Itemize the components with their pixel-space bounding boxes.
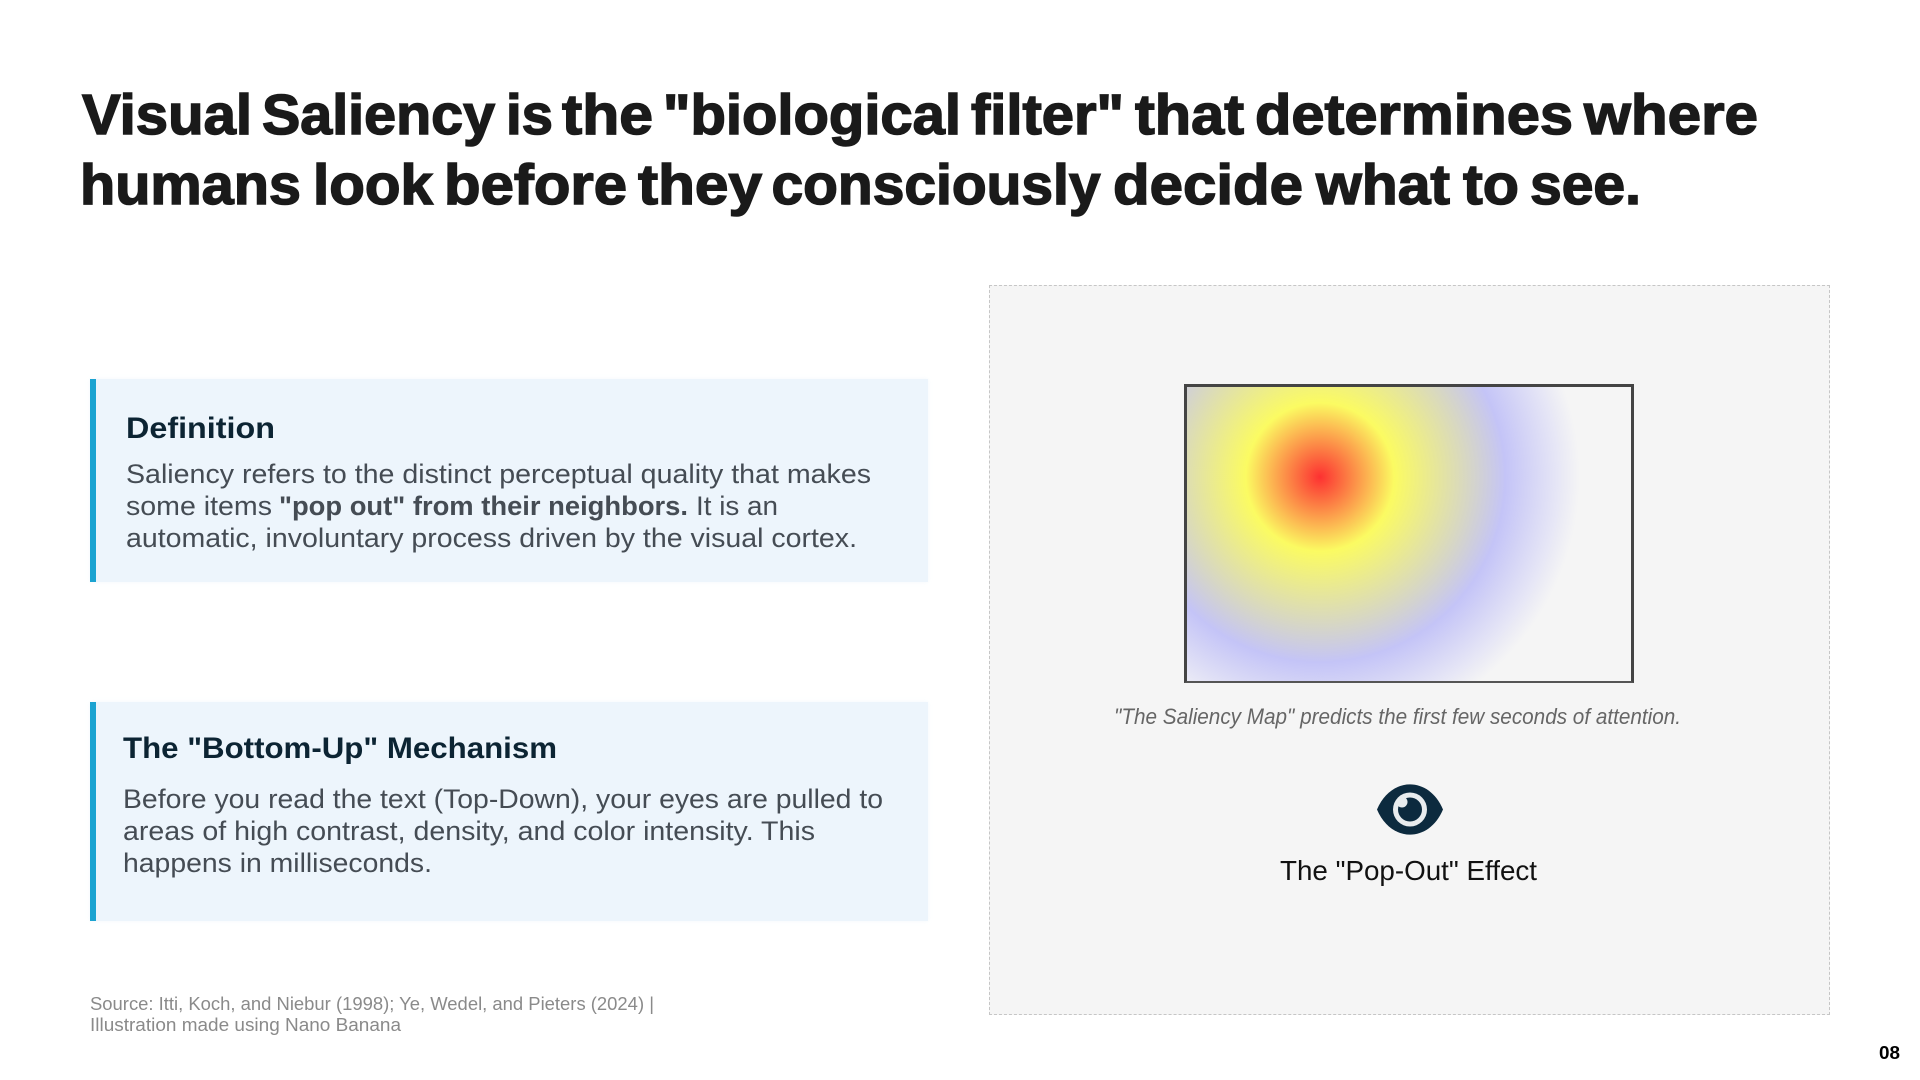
text: definition body: Saliency refers to the distinct perceptual quality that makes	[126, 459, 871, 489]
text: definition body: some items	[126, 491, 272, 521]
title: determines	[1255, 83, 1573, 147]
label: pop-out effect: The "Pop-Out" Effect	[1280, 855, 1537, 886]
text: definition body	[126, 459, 871, 553]
title	[80, 83, 1758, 217]
icon: eye	[1377, 784, 1443, 835]
text: mechanism body	[123, 784, 883, 878]
title: Visual	[82, 83, 252, 147]
panel: definition	[90, 379, 928, 582]
title: before	[444, 153, 627, 217]
text: mechanism body: Before you read the text (Top-Down), your eyes are pulled to	[123, 784, 883, 814]
title: that	[1135, 83, 1244, 147]
title: to	[1463, 153, 1519, 217]
source note: Illustration made using Nano Banana	[90, 1014, 402, 1035]
page number: 08	[1879, 1042, 1900, 1063]
heading: bottom-up mechanism: The "Bottom-Up" Mechanism	[123, 732, 557, 765]
title: humans	[80, 153, 301, 217]
panel: saliency illustration	[989, 285, 1830, 1015]
title: the	[562, 83, 653, 147]
title: Saliency	[262, 83, 495, 147]
text: definition body: It is an	[696, 491, 778, 521]
title: what	[1315, 153, 1450, 217]
title: is	[506, 83, 553, 147]
title: "biological	[663, 83, 961, 147]
chart: saliency heat map	[1184, 384, 1634, 683]
title: look	[313, 153, 433, 217]
heading: definition: Definition	[126, 412, 275, 445]
title: filter"	[971, 83, 1124, 147]
text: definition body: "pop out" from their neighbors.	[279, 491, 688, 521]
title: decide	[1113, 153, 1303, 217]
text: mechanism body: areas of high contrast, density, and color intensity. This	[123, 816, 815, 846]
source note: Source: Itti, Koch, and Niebur (1998); Ye, Wedel, and Pieters (2024) |	[90, 993, 654, 1014]
title: where	[1583, 83, 1758, 147]
title: consciously	[772, 153, 1101, 217]
source note	[90, 993, 654, 1035]
panel: bottom-up mechanism	[90, 702, 928, 921]
text: definition body: automatic, involuntary process driven by the visual cortex.	[126, 523, 857, 553]
title: see.	[1530, 153, 1641, 217]
title: they	[638, 153, 762, 217]
caption: "The Saliency Map" predicts the first few seconds of attention.	[1114, 704, 1681, 729]
text: mechanism body: happens in milliseconds.	[123, 848, 432, 878]
